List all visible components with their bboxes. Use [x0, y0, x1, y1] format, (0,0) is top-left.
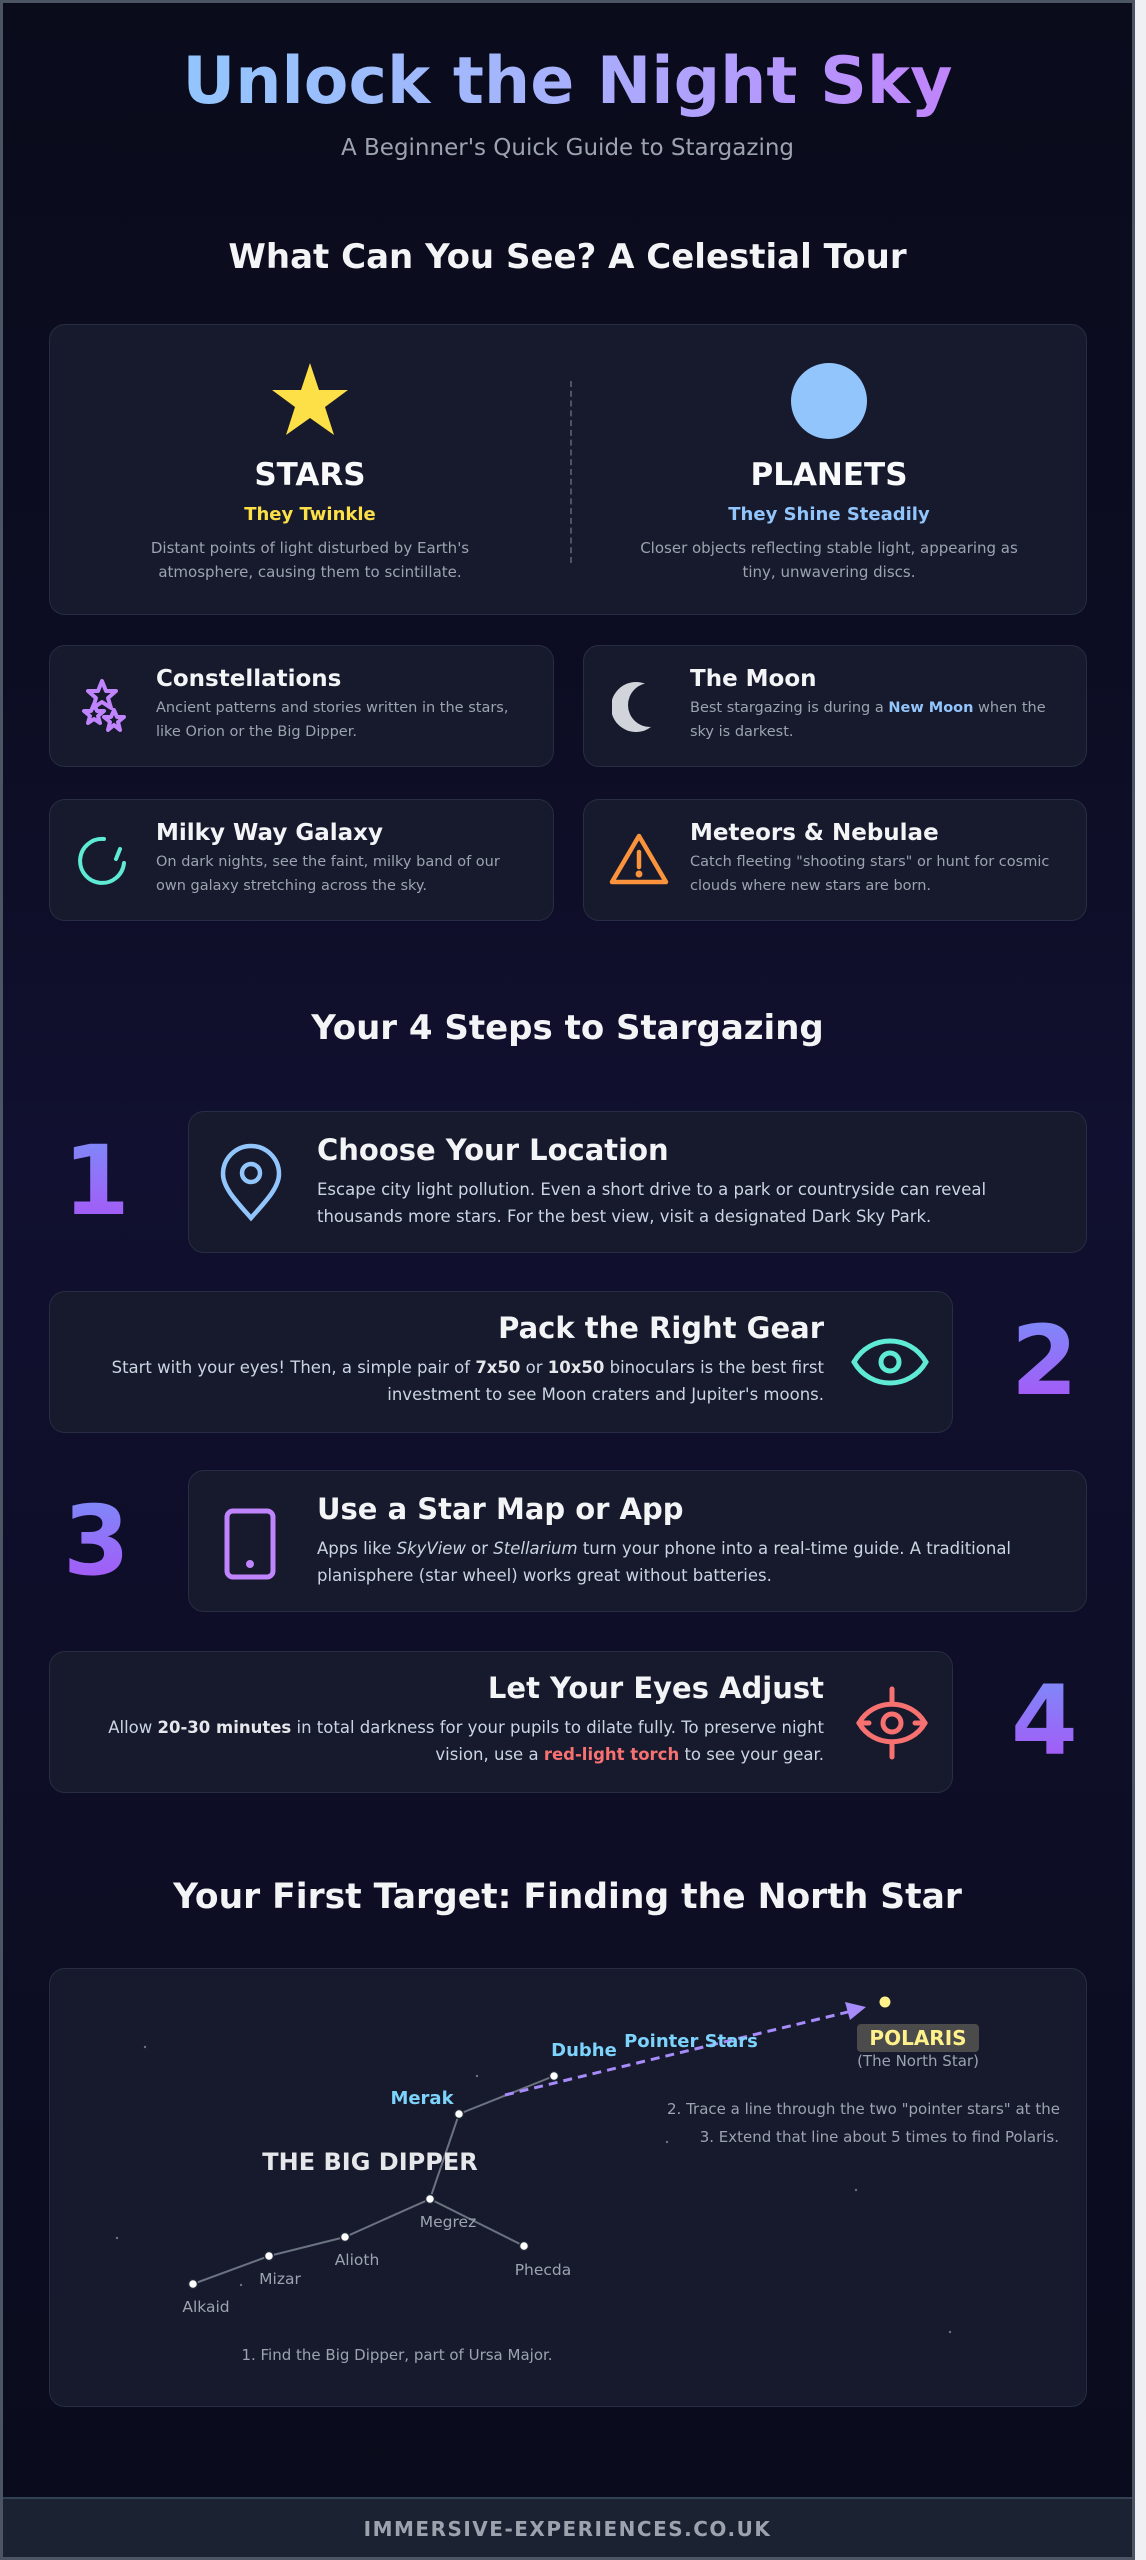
step 4 card: Allow 20-30 minutes in total darkness for your pupils to dilate fully. To preserve night vision, use a red-light torch to see your gear.	[108, 1718, 824, 1764]
card: constellations: Ancient patterns and stories written in the stars, like Orion or the Big Dipper.	[156, 700, 508, 740]
step 2 number: 2	[1011, 1305, 1078, 1417]
icon: planet	[791, 363, 867, 439]
text: steps	[241, 2100, 1060, 2364]
chart: big dipper map: Megrez	[420, 2213, 476, 2231]
chart: big dipper map: Alkaid	[182, 2298, 230, 2316]
card: constellations	[49, 645, 554, 767]
card: meteors	[583, 799, 1087, 921]
card: meteors: Catch fleeting "shooting stars" or hunt for cosmic clouds where new stars are born.	[690, 854, 1049, 894]
icon: star	[272, 363, 348, 435]
step 1 card: Escape city light pollution. Even a short drive to a park or countryside can reveal thousands more stars. For the best view, visit a designated Dark Sky Park.	[317, 1180, 986, 1226]
text: stars	[151, 457, 469, 581]
text: steps: 3. Extend that line about 5 times to find Polaris.	[700, 2128, 1059, 2146]
card: milky way: On dark nights, see the faint, milky band of our own galaxy stretching across the sky.	[156, 854, 500, 894]
icon: moon	[612, 682, 652, 732]
step 4 card: Let Your Eyes Adjust	[488, 1671, 824, 1705]
icon: eye	[851, 1338, 929, 1386]
card: moon	[583, 645, 1087, 767]
chart: big dipper map: Merak	[390, 2088, 455, 2109]
step 3 card: Use a Star Map or App	[317, 1492, 684, 1526]
card: meteors: Meteors & Nebulae	[690, 820, 939, 846]
step 1 card: Choose Your Location	[317, 1133, 669, 1167]
card: moon: The Moon	[690, 666, 817, 692]
divider	[570, 381, 572, 563]
step 4 number: 4	[1011, 1665, 1078, 1777]
title: Unlock the Night Sky	[182, 44, 953, 119]
step 1 number: 1	[63, 1125, 130, 1237]
icon: location pin	[220, 1144, 282, 1222]
step 2 card: Start with your eyes! Then, a simple pair of 7x50 or 10x50 binoculars is the best first investment to see Moon craters and Jupiter's moons.	[112, 1358, 824, 1404]
text: stars: Distant points of light disturbed by Earth's	[151, 539, 469, 557]
icon: eye crosshair	[856, 1686, 928, 1760]
label: polaris: (The North Star)	[857, 2052, 979, 2070]
text: planets: tiny, unwavering discs.	[742, 563, 916, 581]
chart: big dipper map: THE BIG DIPPER	[262, 2148, 478, 2176]
text: planets: Closer objects reflecting stable light, appearing as	[640, 539, 1018, 557]
step 2 card: Pack the Right Gear	[498, 1311, 824, 1345]
text: planets: PLANETS	[750, 457, 908, 493]
icon: constellation	[82, 678, 126, 732]
chart: big dipper map: Phecda	[515, 2261, 571, 2279]
heading: north star: Your First Target: Finding the North Star	[173, 1877, 962, 1917]
icon: galaxy	[78, 836, 126, 885]
step 2 card	[49, 1291, 953, 1433]
text: stars: STARS	[254, 457, 366, 493]
icon: warning triangle	[610, 834, 668, 884]
text: planets	[640, 457, 1018, 581]
heading: celestial tour: What Can You See? A Celestial Tour	[228, 237, 907, 277]
chart: big dipper map: Alioth	[335, 2251, 379, 2269]
text: stars: They Twinkle	[244, 504, 376, 525]
icon: phone	[224, 1508, 276, 1580]
chart: big dipper map: Dubhe	[551, 2040, 617, 2061]
label: polaris	[857, 2024, 979, 2070]
text: steps: 2. Trace a line through the two "pointer stars" at the	[667, 2100, 1060, 2118]
panel: star map	[49, 1968, 1087, 2407]
footer: IMMERSIVE-EXPERIENCES.CO.UK	[364, 2517, 771, 2541]
text: steps: 1. Find the Big Dipper, part of Ursa Major.	[241, 2346, 553, 2364]
card: constellations: Constellations	[156, 666, 341, 692]
text: stars: atmosphere, causing them to scintillate.	[158, 563, 462, 581]
step 1 card	[188, 1111, 1087, 1253]
step 3 card: Apps like SkyView or Stellarium turn your phone into a real-time guide. A traditional planisphere (star wheel) works great without batteries.	[317, 1539, 1011, 1585]
card: milky way	[49, 799, 554, 921]
card: milky way: Milky Way Galaxy	[156, 820, 383, 846]
footer	[3, 2497, 1132, 2560]
panel: stars vs planets	[49, 324, 1087, 615]
step 3 number: 3	[63, 1485, 130, 1597]
step 4 card	[49, 1651, 953, 1793]
icon: polaris	[880, 1996, 890, 2008]
card: moon: Best stargazing is during a New Moon when the sky is darkest.	[690, 700, 1046, 740]
step 3 card	[188, 1470, 1087, 1612]
chart: big dipper map: Mizar	[259, 2270, 301, 2288]
subtitle: A Beginner's Quick Guide to Stargazing	[341, 135, 794, 161]
label: polaris: POLARIS	[869, 2026, 967, 2050]
heading: steps: Your 4 Steps to Stargazing	[311, 1008, 824, 1048]
chart: big dipper map: Pointer Stars	[624, 2031, 758, 2052]
text: planets: They Shine Steadily	[728, 504, 930, 525]
arrow: pointer line	[505, 2002, 866, 2095]
